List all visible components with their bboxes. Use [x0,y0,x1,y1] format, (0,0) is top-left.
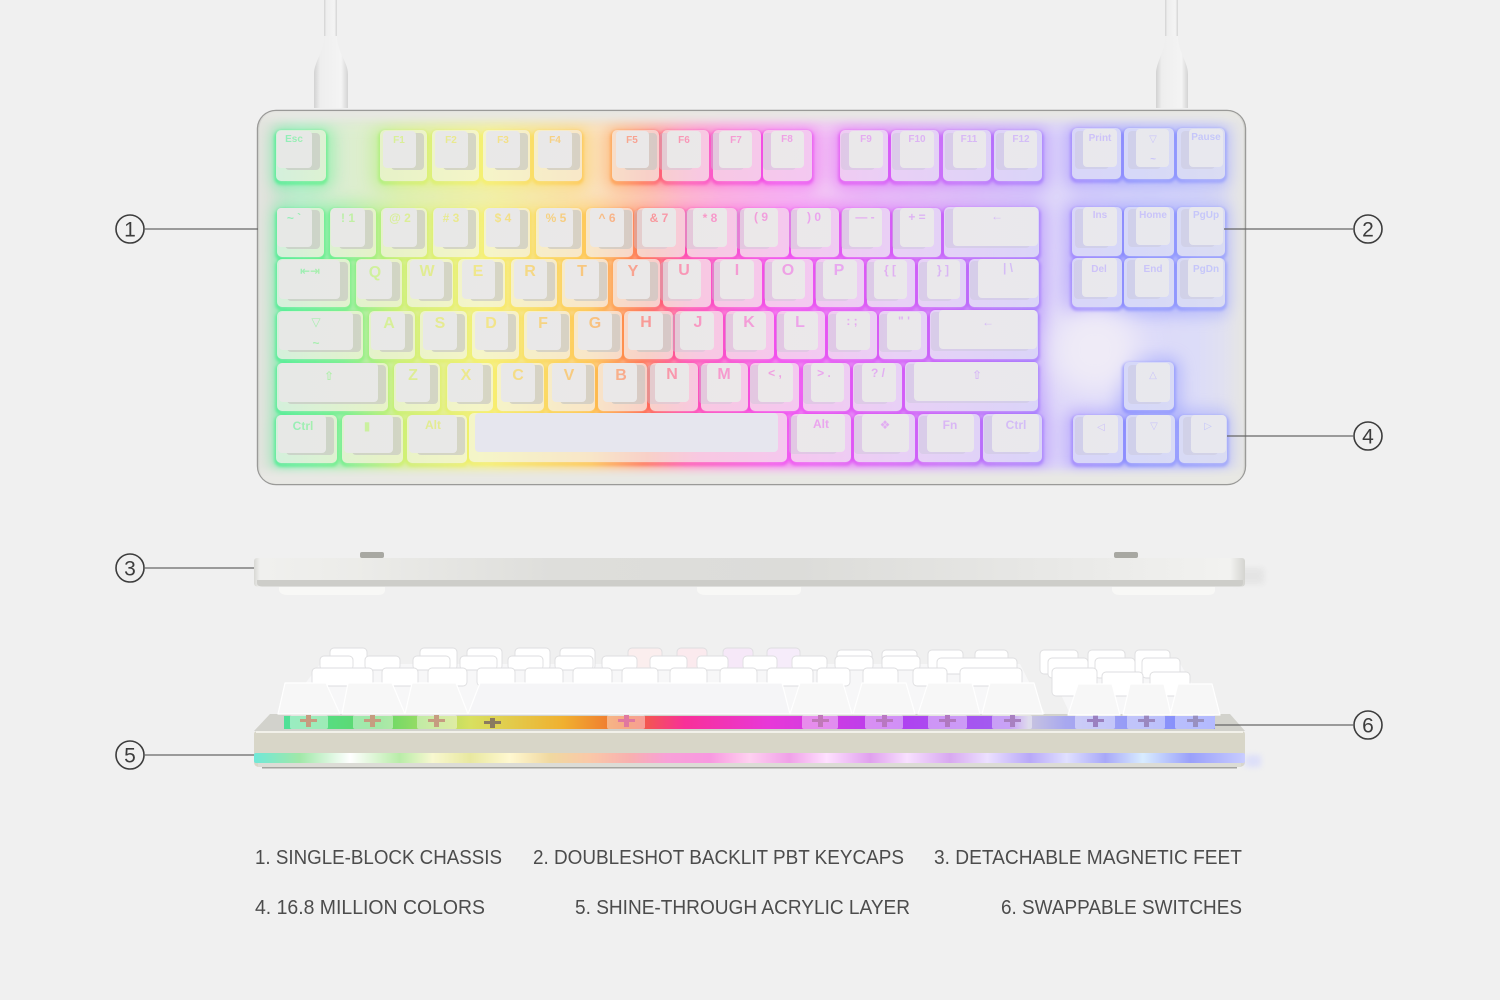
key legends: PgDn [1193,264,1219,275]
front row keycaps [278,683,1220,715]
key legends: X [461,367,472,384]
feet [279,587,1215,595]
key legends: F10 [908,134,926,145]
feature list: 1. SINGLE-BLOCK CHASSIS [255,847,502,869]
side chassis [254,558,1245,586]
key legends: ⇤⇥ [300,264,320,278]
key legends: Alt [425,418,441,432]
key legends: ▽ [1149,134,1157,145]
callout 2: 2 [1362,218,1374,242]
key legends: Alt [813,417,829,431]
key legends: ^ 6 [598,211,616,225]
key legends: Y [628,263,639,280]
key legends: ? / [871,366,886,380]
key legends: ◁ [1097,422,1105,433]
key legends: % 5 [546,211,567,225]
key legends: H [640,314,652,331]
key legends: Fn [943,418,957,432]
key legends: F11 [961,134,978,145]
keycap top surfaces [277,129,1226,453]
key legends: } ] [937,263,949,277]
feature list: 6. SWAPPABLE SWITCHES [1001,897,1242,919]
key legends: D [485,315,497,332]
screws [360,552,1138,558]
key legends: C [512,367,524,384]
side bottom bevel [257,580,1243,586]
top view keyboard [250,108,1250,488]
key legends: Z [408,367,418,384]
key legends: ▷ [1204,421,1212,432]
blue side glow [1245,755,1261,767]
callout 1 [116,215,258,243]
key legends: R [524,263,536,280]
front view keyboard [254,648,1261,768]
key legends: W [419,263,435,280]
key legends: F9 [860,134,872,145]
key legends: B [615,367,627,384]
key legends: ) 0 [807,210,821,224]
key legends: " ' [898,314,910,328]
back keycap row 3 [312,668,1190,696]
callout 4 [1227,422,1382,450]
feature list [255,847,1242,919]
key legends: ~ [1150,154,1156,165]
key legends: F2 [445,135,457,146]
key legends: K [743,314,755,331]
key legends: △ [1149,370,1157,381]
clear switches [290,715,1215,729]
key legends [285,132,1221,433]
side view keyboard [254,552,1264,595]
key legends: V [564,367,575,384]
key legends: F12 [1012,134,1030,145]
key legends: # 3 [443,211,460,225]
callout 3: 3 [124,558,136,580]
front chassis [254,731,1245,767]
key legends: T [577,263,587,280]
key legends: ← [982,315,994,329]
switch stems [300,715,1204,728]
callout 1: 1 [124,218,136,242]
back keycap row 1 [330,648,1170,674]
back keycap row 2 [320,656,1180,678]
key legends: Q [369,264,381,281]
keycap backdrop [282,660,1210,714]
callout 6: 6 [1362,714,1374,738]
key legends: @ 2 [389,211,411,225]
key legends: > . [817,366,831,380]
key legends: : ; [846,314,858,328]
key legends: ▽ [1150,421,1158,432]
key legends: U [678,262,690,279]
callout 4: 4 [1362,426,1374,448]
key legends: + = [908,210,926,224]
key legends: F8 [781,134,793,145]
key legends: Home [1139,210,1167,221]
key legends: F5 [626,135,638,146]
key legends: E [473,263,484,280]
feature list: 2. DOUBLESHOT BACKLIT PBT KEYCAPS [533,847,904,869]
key legends: M [717,366,731,383]
key legends: N [666,366,678,383]
key legends: Ctrl [293,419,313,433]
callout 5 [116,741,254,769]
right USB cable [1156,0,1188,108]
key legends: S [435,315,446,332]
chassis lip [258,763,1241,767]
plate glow [250,108,1250,488]
key legends: & 7 [650,211,669,225]
key legends: F7 [730,135,742,146]
keycap skirts [276,128,1227,463]
key legends: — - [855,210,875,224]
key legends: Ins [1093,210,1108,221]
key legends: | \ [1003,261,1014,275]
key legends: ▽ [311,315,321,329]
key legends: PgUp [1193,210,1219,221]
feature list: 5. SHINE-THROUGH ACRYLIC LAYER [575,897,910,919]
callout 5: 5 [124,744,136,768]
key legends: End [1144,264,1162,275]
key legends: Esc [285,134,303,145]
key legends: < , [768,366,782,380]
key legends: G [589,315,601,332]
key legends: ! 1 [341,211,355,225]
callout 2 [1224,215,1382,243]
key backlight [276,130,1227,465]
panel: keyboard chassis plate [258,111,1245,484]
callout 3 [116,554,254,582]
key legends: F1 [393,135,405,146]
keycap shaded sides [285,131,1218,455]
acrylic light bar [254,753,1245,763]
switch backlight strip [284,716,1215,729]
key legends: ⇧ [972,368,982,382]
key legends: J [694,314,702,331]
key legends: ( 9 [754,210,768,224]
key legends: F6 [678,135,690,146]
key legends: O [782,262,794,279]
chassis highlight [256,731,1243,733]
front plate [254,714,1245,731]
key legends: P [834,262,845,279]
left USB cable [314,0,348,108]
key legends: Print [1089,133,1112,144]
key legends: ~ [312,336,320,350]
key legends: { [ [884,263,896,277]
key legends: F4 [549,135,561,146]
key legends: ← [991,209,1003,223]
key legends: ⇧ [324,369,334,383]
key legends: Pause [1191,132,1221,143]
key legends: I [735,262,739,279]
key legends: L [795,314,805,331]
key legends: F [538,315,548,332]
key legends: $ 4 [495,211,512,225]
feature list: 3. DETACHABLE MAGNETIC FEET [934,847,1242,869]
key legends: A [383,315,395,332]
key legends: ❖ [880,418,890,432]
side view shadow [1232,568,1264,584]
key legends: Ctrl [1006,418,1026,432]
key legends: ▮ [364,419,370,433]
front shadow [262,767,1237,768]
key legends: * 8 [703,211,718,225]
key legends: Del [1091,264,1107,275]
key legends: F3 [497,135,509,146]
feature list: 4. 16.8 MILLION COLORS [255,897,485,919]
key legends: ~ ` [287,211,301,225]
callout 6 [1215,711,1382,739]
